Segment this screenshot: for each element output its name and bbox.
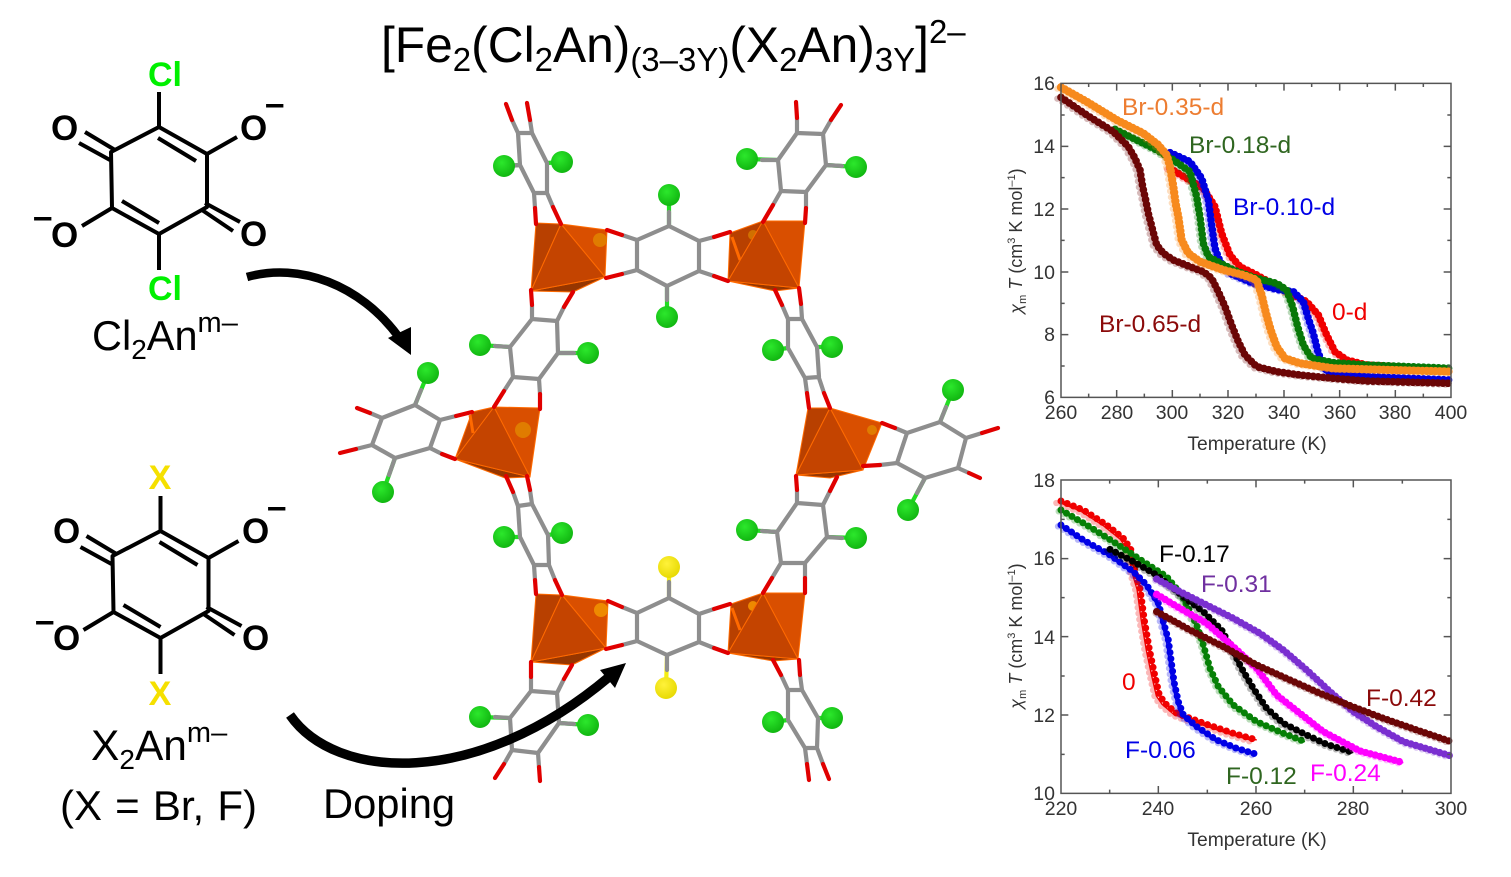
x tick labels: 380 xyxy=(1379,402,1411,424)
y axis title: T xyxy=(1006,277,1026,295)
x tick labels: 300 xyxy=(1156,402,1188,424)
halogen labels xyxy=(149,459,172,713)
curve F-0.31 xyxy=(1155,579,1451,758)
x tick labels xyxy=(1045,402,1467,424)
y tick labels xyxy=(1033,470,1055,805)
title: (Cl xyxy=(471,17,535,73)
series labels: F-0.17 xyxy=(1159,541,1230,568)
y tick labels: 14 xyxy=(1033,627,1055,649)
arrow: doping to framework xyxy=(290,663,626,763)
oxygen labels: – xyxy=(267,487,286,526)
ligand top right pendant xyxy=(736,102,867,223)
title: 2 xyxy=(779,41,797,78)
series labels: F-0.42 xyxy=(1366,685,1437,712)
data curves, bottom chart xyxy=(1056,480,1451,793)
ligand right middle xyxy=(762,288,843,408)
oxygen labels: – xyxy=(35,601,54,640)
x axis title: Temperature (K) xyxy=(1187,434,1327,455)
oxygen labels: O xyxy=(53,512,80,551)
oxygen labels: – xyxy=(265,84,284,123)
title: [Fe xyxy=(381,17,453,73)
title: An) xyxy=(797,17,875,73)
oxygen labels: O xyxy=(53,619,80,658)
halogen labels: X xyxy=(149,459,172,497)
X2An label: X xyxy=(91,723,119,770)
Cl2An label: Cl xyxy=(92,312,131,359)
ligand left pendant xyxy=(340,362,472,503)
series labels: 0-d xyxy=(1332,299,1367,326)
curve Br-0.10-d xyxy=(1167,153,1451,381)
curve 0-d xyxy=(1167,168,1451,371)
y axis title: –1 xyxy=(1006,174,1018,187)
oxygen labels: O xyxy=(240,215,267,254)
y axis title: –1 xyxy=(1006,569,1018,582)
halogen-substituted ring bonds xyxy=(80,496,242,674)
X equals label: (X = Br, F) xyxy=(60,782,257,829)
title: An) xyxy=(553,17,630,73)
y axis title: K mol xyxy=(1006,582,1026,633)
ligand top left pendant xyxy=(493,103,573,224)
y tick labels: 12 xyxy=(1033,705,1055,727)
y axis title: ) xyxy=(1006,563,1026,569)
chlorine labels xyxy=(148,56,182,308)
x tick labels: 260 xyxy=(1240,798,1272,820)
series labels: Br-0.35-d xyxy=(1122,94,1224,121)
y tick labels: 8 xyxy=(1044,324,1055,346)
ligand bottom right pendant xyxy=(762,660,843,780)
chlorine-substituted ring bonds xyxy=(79,92,240,270)
crystal structure xyxy=(340,102,998,781)
curve 0 xyxy=(1056,501,1257,742)
chart: Br-doped magnetic curves xyxy=(1006,73,1467,455)
y tick labels: 16 xyxy=(1033,73,1055,95)
x tick labels: 400 xyxy=(1435,402,1467,424)
ligand bottom left pendant xyxy=(469,662,599,781)
curve Br-0.18-d xyxy=(1112,129,1451,369)
title: 3Y xyxy=(875,41,915,78)
x tick labels: 340 xyxy=(1268,402,1300,424)
polyhedron top left xyxy=(531,223,607,292)
title: (3–3Y) xyxy=(630,41,729,78)
x tick labels: 240 xyxy=(1142,798,1174,820)
y tick labels: 10 xyxy=(1033,783,1055,805)
title: 2 xyxy=(535,41,553,78)
y axis title: K mol xyxy=(1006,187,1026,238)
chlorine labels: Cl xyxy=(148,270,182,308)
ligand right pendant xyxy=(863,379,998,521)
polyhedron bottom right xyxy=(728,593,805,661)
series labels: 0 xyxy=(1122,669,1136,696)
oxygen labels: O xyxy=(51,109,78,148)
y axis title: T xyxy=(1006,672,1026,690)
curve F-0.06 xyxy=(1058,525,1257,756)
data curves, top chart xyxy=(1057,83,1451,397)
title: ] xyxy=(915,17,929,73)
X2An molecule xyxy=(35,459,286,829)
series labels: F-0.06 xyxy=(1125,737,1196,764)
chlorine labels: Cl xyxy=(148,56,182,94)
arrow: Cl2An to framework xyxy=(247,272,411,355)
series labels: F-0.24 xyxy=(1310,760,1381,787)
x tick labels: 280 xyxy=(1101,402,1133,424)
oxygen labels: O xyxy=(51,216,78,255)
y axis title: m xyxy=(1017,690,1029,699)
X2An label: 2 xyxy=(119,744,135,775)
X2An label: An xyxy=(135,723,187,770)
series labels: F-0.31 xyxy=(1201,571,1272,598)
title: (X xyxy=(729,17,779,73)
oxygen labels: – xyxy=(33,197,52,236)
polyhedron bottom left xyxy=(531,594,608,665)
y axis title: (cm xyxy=(1006,639,1026,669)
Doping label: Doping xyxy=(323,780,455,827)
oxygen labels: O xyxy=(242,512,269,551)
y tick labels: 16 xyxy=(1033,548,1055,570)
y axis title: ) xyxy=(1006,168,1026,174)
title: 2– xyxy=(929,13,966,50)
chart: F-doped magnetic curves xyxy=(1006,470,1467,851)
Cl2An label: 2 xyxy=(131,334,147,365)
y axis title: (cm xyxy=(1006,244,1026,274)
oxygen labels xyxy=(35,487,286,658)
y tick labels: 6 xyxy=(1044,387,1055,409)
x tick labels xyxy=(1045,798,1467,820)
series labels: Br-0.65-d xyxy=(1099,311,1201,338)
y axis title: m xyxy=(1017,295,1029,304)
curve F-0.17 xyxy=(1107,549,1353,754)
y tick labels: 18 xyxy=(1033,470,1055,492)
y tick labels: 10 xyxy=(1033,262,1055,284)
y tick labels: 14 xyxy=(1033,136,1055,158)
y tick labels xyxy=(1033,73,1055,409)
doped ligand bottom centre xyxy=(606,556,730,699)
x tick labels: 360 xyxy=(1324,402,1356,424)
x tick labels: 300 xyxy=(1435,798,1467,820)
series labels: Br-0.10-d xyxy=(1233,194,1335,221)
y axis title: 3 xyxy=(1006,633,1018,639)
title: 2 xyxy=(453,41,471,78)
ligand lower left upper xyxy=(493,476,573,595)
curve F-0.24 xyxy=(1155,594,1403,764)
oxygen labels xyxy=(33,84,284,255)
y axis title: χ xyxy=(1006,698,1026,711)
polyhedron top right xyxy=(728,221,805,291)
oxygen labels: O xyxy=(242,619,269,658)
x tick labels: 260 xyxy=(1045,402,1077,424)
curve F-0.12 xyxy=(1059,510,1305,743)
x axis title: Temperature (K) xyxy=(1187,830,1327,851)
axes frame and ticks xyxy=(1061,480,1451,793)
X2An label: m– xyxy=(187,717,228,749)
Cl2An label: An xyxy=(147,312,198,359)
polyhedron left xyxy=(455,407,540,478)
ligand lower right upper xyxy=(736,476,867,593)
series labels xyxy=(1122,541,1437,790)
series labels: Br-0.18-d xyxy=(1189,132,1291,159)
y tick labels: 12 xyxy=(1033,199,1055,221)
axes frame and ticks xyxy=(1061,83,1451,397)
curve F-0.42 xyxy=(1156,612,1451,743)
curve Br-0.35-d xyxy=(1057,87,1451,373)
oxygen labels: O xyxy=(240,109,267,148)
Cl2An label: m– xyxy=(198,307,239,339)
ligand top centre xyxy=(606,184,730,328)
halogen labels: X xyxy=(149,675,172,713)
x tick labels: 320 xyxy=(1212,402,1244,424)
x tick labels: 220 xyxy=(1045,798,1077,820)
Cl2An molecule xyxy=(33,56,284,365)
series labels: F-0.12 xyxy=(1226,763,1297,790)
curve Br-0.65-d xyxy=(1057,97,1451,385)
y axis title: χ xyxy=(1006,303,1026,316)
x tick labels: 280 xyxy=(1337,798,1369,820)
polyhedron right xyxy=(796,408,882,478)
ligand left middle xyxy=(469,290,599,409)
y axis title: 3 xyxy=(1006,238,1018,244)
series labels xyxy=(1099,94,1367,338)
